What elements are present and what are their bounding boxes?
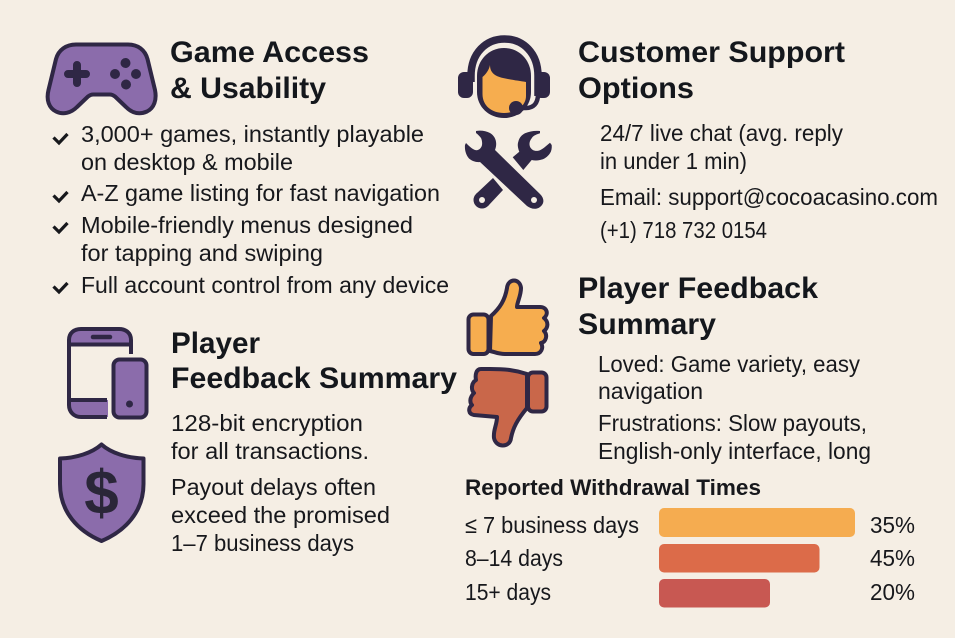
heading: player feedback summary right: Player Feedback [578, 272, 818, 305]
chart title: Reported Withdrawal Times [465, 475, 761, 500]
bullet text: menus: for tapping and swiping [81, 240, 323, 266]
text block: frustrations: Frustrations: Slow payouts, [598, 410, 867, 436]
checklist: game access features [54, 121, 449, 298]
bullet text: menus [81, 212, 413, 266]
text block: live chat: 24/7 live chat (avg. reply [600, 120, 843, 146]
text block: frustrations [598, 410, 871, 464]
icon: check mark [54, 134, 68, 143]
text block: payout delays [171, 474, 390, 556]
row: up to 7 business days [465, 508, 915, 538]
heading: player feedback summary left: Feedback Summary [171, 362, 457, 395]
text block: loved [598, 351, 860, 404]
row: 15 plus days: 15+ days [465, 579, 551, 605]
text block: live chat [600, 120, 843, 174]
icon: crossed wrenches [465, 131, 552, 209]
row: 8 to 14 days: 8–14 days [465, 545, 563, 571]
icon: tablet and phone [69, 329, 146, 418]
panel: player feedback summary [468, 272, 871, 464]
heading: player feedback summary left: Player [171, 327, 260, 360]
icon: shield with dollar sign: $ [84, 459, 119, 528]
text block: frustrations: English-only interface, long [598, 438, 871, 464]
bullet text: games [81, 121, 424, 175]
bar chart: reported withdrawal times [465, 475, 915, 608]
heading: player feedback summary right [578, 272, 818, 341]
icon: thumbs down [469, 369, 546, 446]
row: 15 plus days [465, 579, 915, 608]
panel: security and payout summary [60, 327, 457, 556]
icon: support agent headset [458, 39, 550, 118]
row: 15 plus days: 20% [870, 579, 915, 605]
heading: customer support options: Options [578, 72, 694, 105]
bullet text: games: 3,000+ games, instantly playable [81, 121, 424, 147]
row: 8 to 14 days [465, 544, 915, 572]
heading: player feedback summary right: Summary [578, 308, 716, 341]
heading: player feedback summary left [171, 327, 457, 395]
text block: loved: Loved: Game variety, easy [598, 351, 860, 377]
bullet text: games: on desktop & mobile [81, 149, 293, 175]
icon: shield with dollar sign [60, 444, 144, 541]
text block: contact details [600, 184, 938, 243]
text block: payout delays: exceed the promised [171, 502, 390, 528]
panel: game access and usability [48, 36, 449, 298]
row: 8 to 14 days: 45% [870, 545, 915, 571]
icon: check mark [54, 192, 68, 201]
text block: contact details: (+1) 718 732 0154 [600, 217, 767, 243]
heading: customer support options: Customer Support [578, 36, 845, 69]
heading: game access and usability [170, 36, 369, 105]
heading: game access and usability: & Usability [170, 72, 326, 105]
text block: contact details: Email: support@cocoacasino.com [600, 184, 938, 210]
icon: check mark [54, 223, 68, 232]
text block: encryption: 128-bit encryption [171, 410, 363, 436]
text block: payout delays: Payout delays often [171, 474, 376, 500]
text block: payout delays: 1–7 business days [171, 530, 354, 556]
heading: game access and usability: Game Access [170, 36, 369, 69]
panel: customer support options [458, 36, 938, 243]
text block: encryption [171, 410, 369, 464]
row: up to 7 business days: 35% [870, 512, 915, 538]
icon: game controller [48, 44, 156, 113]
text block: loved: navigation [598, 378, 703, 404]
icon: check mark [54, 283, 68, 292]
text block: encryption: for all transactions. [171, 438, 369, 464]
heading: customer support options [578, 36, 845, 105]
icon: thumbs up [468, 280, 547, 354]
text block: live chat: in under 1 min) [600, 148, 747, 174]
bullet text: menus: Mobile-friendly menus designed [81, 212, 413, 238]
bullet text: listing: A-Z game listing for fast navigation [81, 180, 440, 206]
row: up to 7 business days: ≤ 7 business days [465, 512, 639, 538]
bullet text: account control: Full account control from any device [81, 272, 449, 298]
